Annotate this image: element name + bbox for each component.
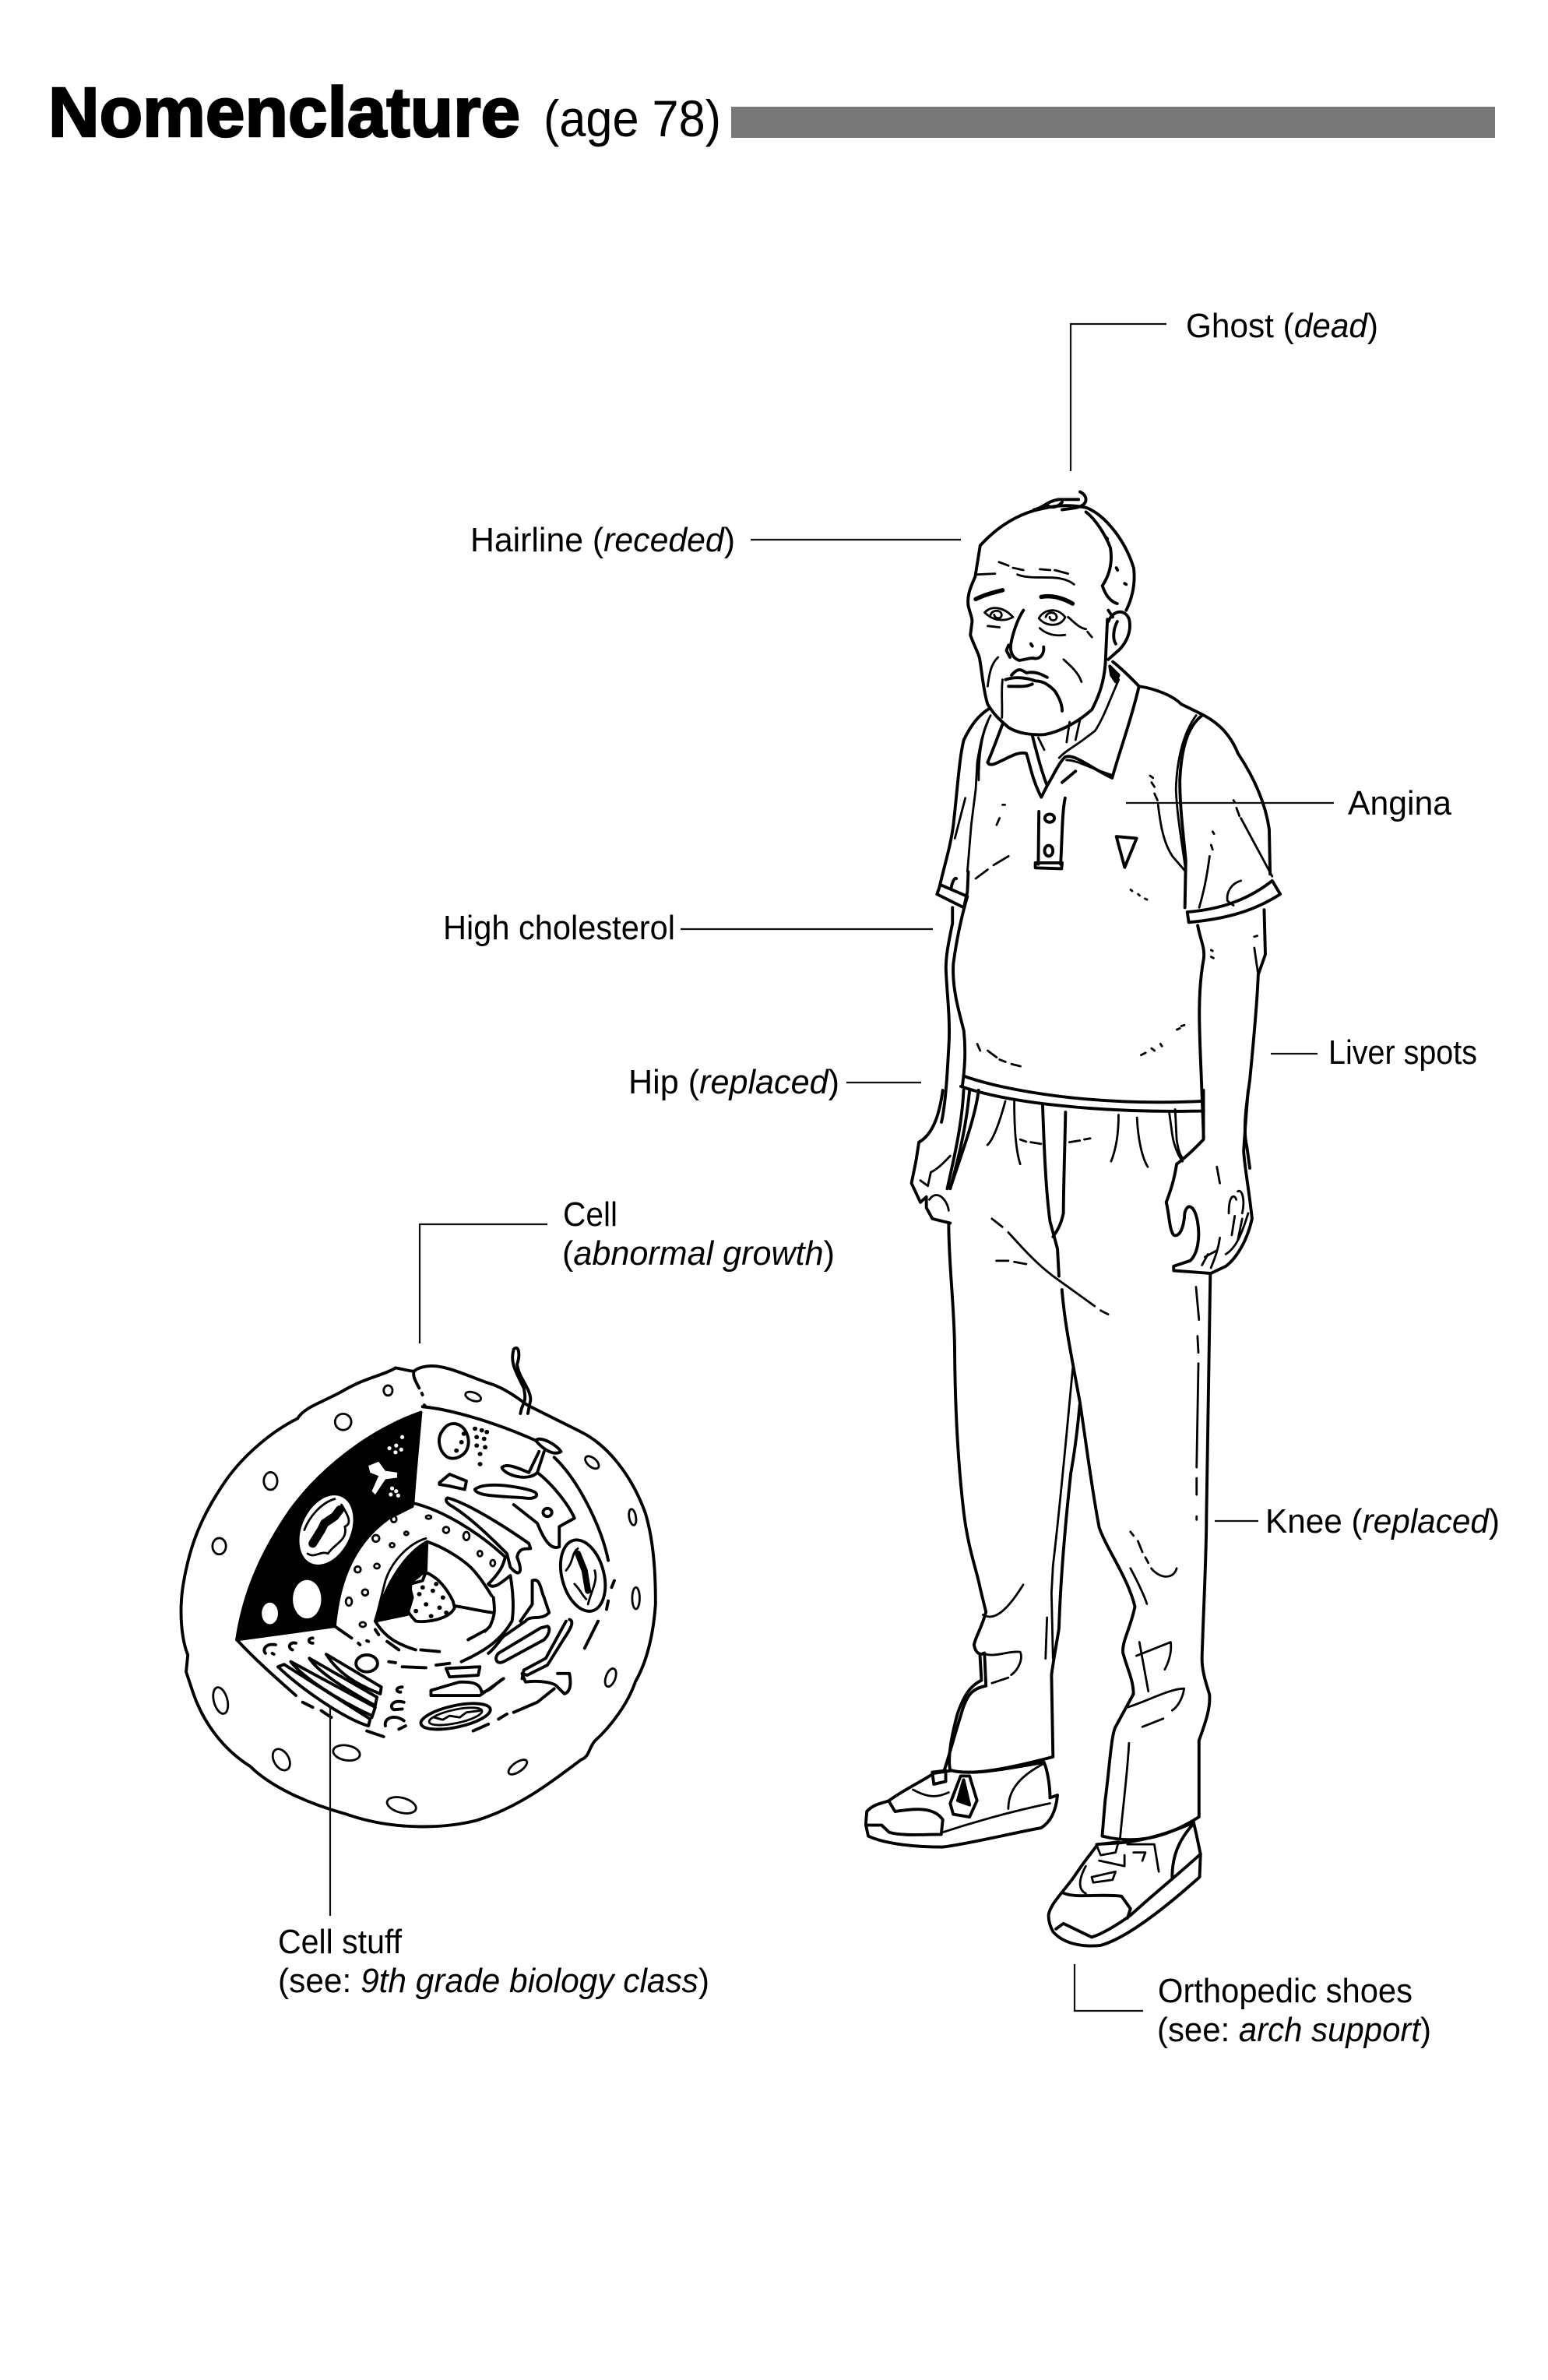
label: Angina: Angina [1348,784,1452,822]
illustration: cell cross-section [181,1348,656,1826]
trouser right leg [1062,1273,1210,1840]
label: Ghost: Ghost (dead) [1186,307,1378,345]
right hand [1166,1090,1252,1273]
title: Nomenclature [48,74,520,152]
label: Liver spots: Liver spots [1328,1033,1477,1072]
right upper arm [1198,910,1265,1168]
cell outer membrane [181,1366,656,1826]
shirt chest pocket triangle [1117,836,1137,868]
leader: High cholesterol [681,928,933,930]
leader: Knee [1215,1520,1258,1522]
shirt right sleeve [1131,686,1280,1055]
mitochondrion in wedge [289,1487,364,1573]
surface pores [210,1385,639,1816]
endoplasmic reticulum and organelles, right [419,1424,613,1734]
leader: Hip [846,1082,921,1083]
shirt left sleeve and body [937,709,1020,1122]
trouser fly and creases [987,1101,1184,1315]
title bar [731,107,1495,138]
label: Hairline: Hairline (receded) [470,521,735,559]
leader: Orthopedic shoes [1075,1964,1143,2011]
head [968,492,1135,734]
illustration: elderly man [866,492,1280,1946]
trouser pocket left [947,1090,979,1188]
label: Cell [562,1195,835,1273]
label: High cholesterol: High cholesterol [443,909,675,947]
title: (age 78) [544,90,721,147]
label: Cell: (abnormal growth) [562,1234,835,1273]
man: head and upper body [937,492,1280,1168]
golgi stack [264,1638,406,1729]
leader: Liver spots [1271,1053,1318,1054]
trouser left leg [945,1224,1080,1773]
flagellum [512,1348,530,1414]
label: Orthopedic shoes: (see: arch support) [1157,2011,1431,2049]
label: Cell stuff: Cell stuff [278,1923,403,1961]
left hand [912,1090,950,1223]
shirt collar [987,662,1139,797]
label: Cell: Cell [563,1195,617,1234]
man: trousers and shoes [866,1090,1252,1946]
black cutaway wedge [237,1413,420,1639]
leader: Cell stuff [329,1706,331,1916]
title [48,74,721,152]
right shoe [1049,1822,1201,1946]
left shoe [866,1762,1057,1847]
inner membrane [237,1407,614,1737]
nucleus [375,1538,494,1652]
label: Cell stuff [278,1923,709,2000]
label: Orthopedic shoes: Orthopedic shoes [1158,1972,1413,2010]
shirt hem [961,1076,1204,1111]
perinuclear ring [335,1503,513,1667]
label: Knee: Knee (replaced) [1265,1502,1500,1540]
vacuoles in wedge [262,1435,404,1625]
cell notch [413,1371,426,1407]
leader: Hairline [751,539,961,540]
shirt placket and buttons [1036,771,1075,868]
label: Cell stuff: (see: 9th grade biology class) [278,1962,709,2000]
leader: Ghost [1071,324,1166,471]
leader: Angina [1126,802,1334,804]
label: Hip: Hip (replaced) [628,1063,839,1101]
leader: Cell [420,1224,547,1343]
label: Orthopedic shoes [1157,1972,1431,2049]
